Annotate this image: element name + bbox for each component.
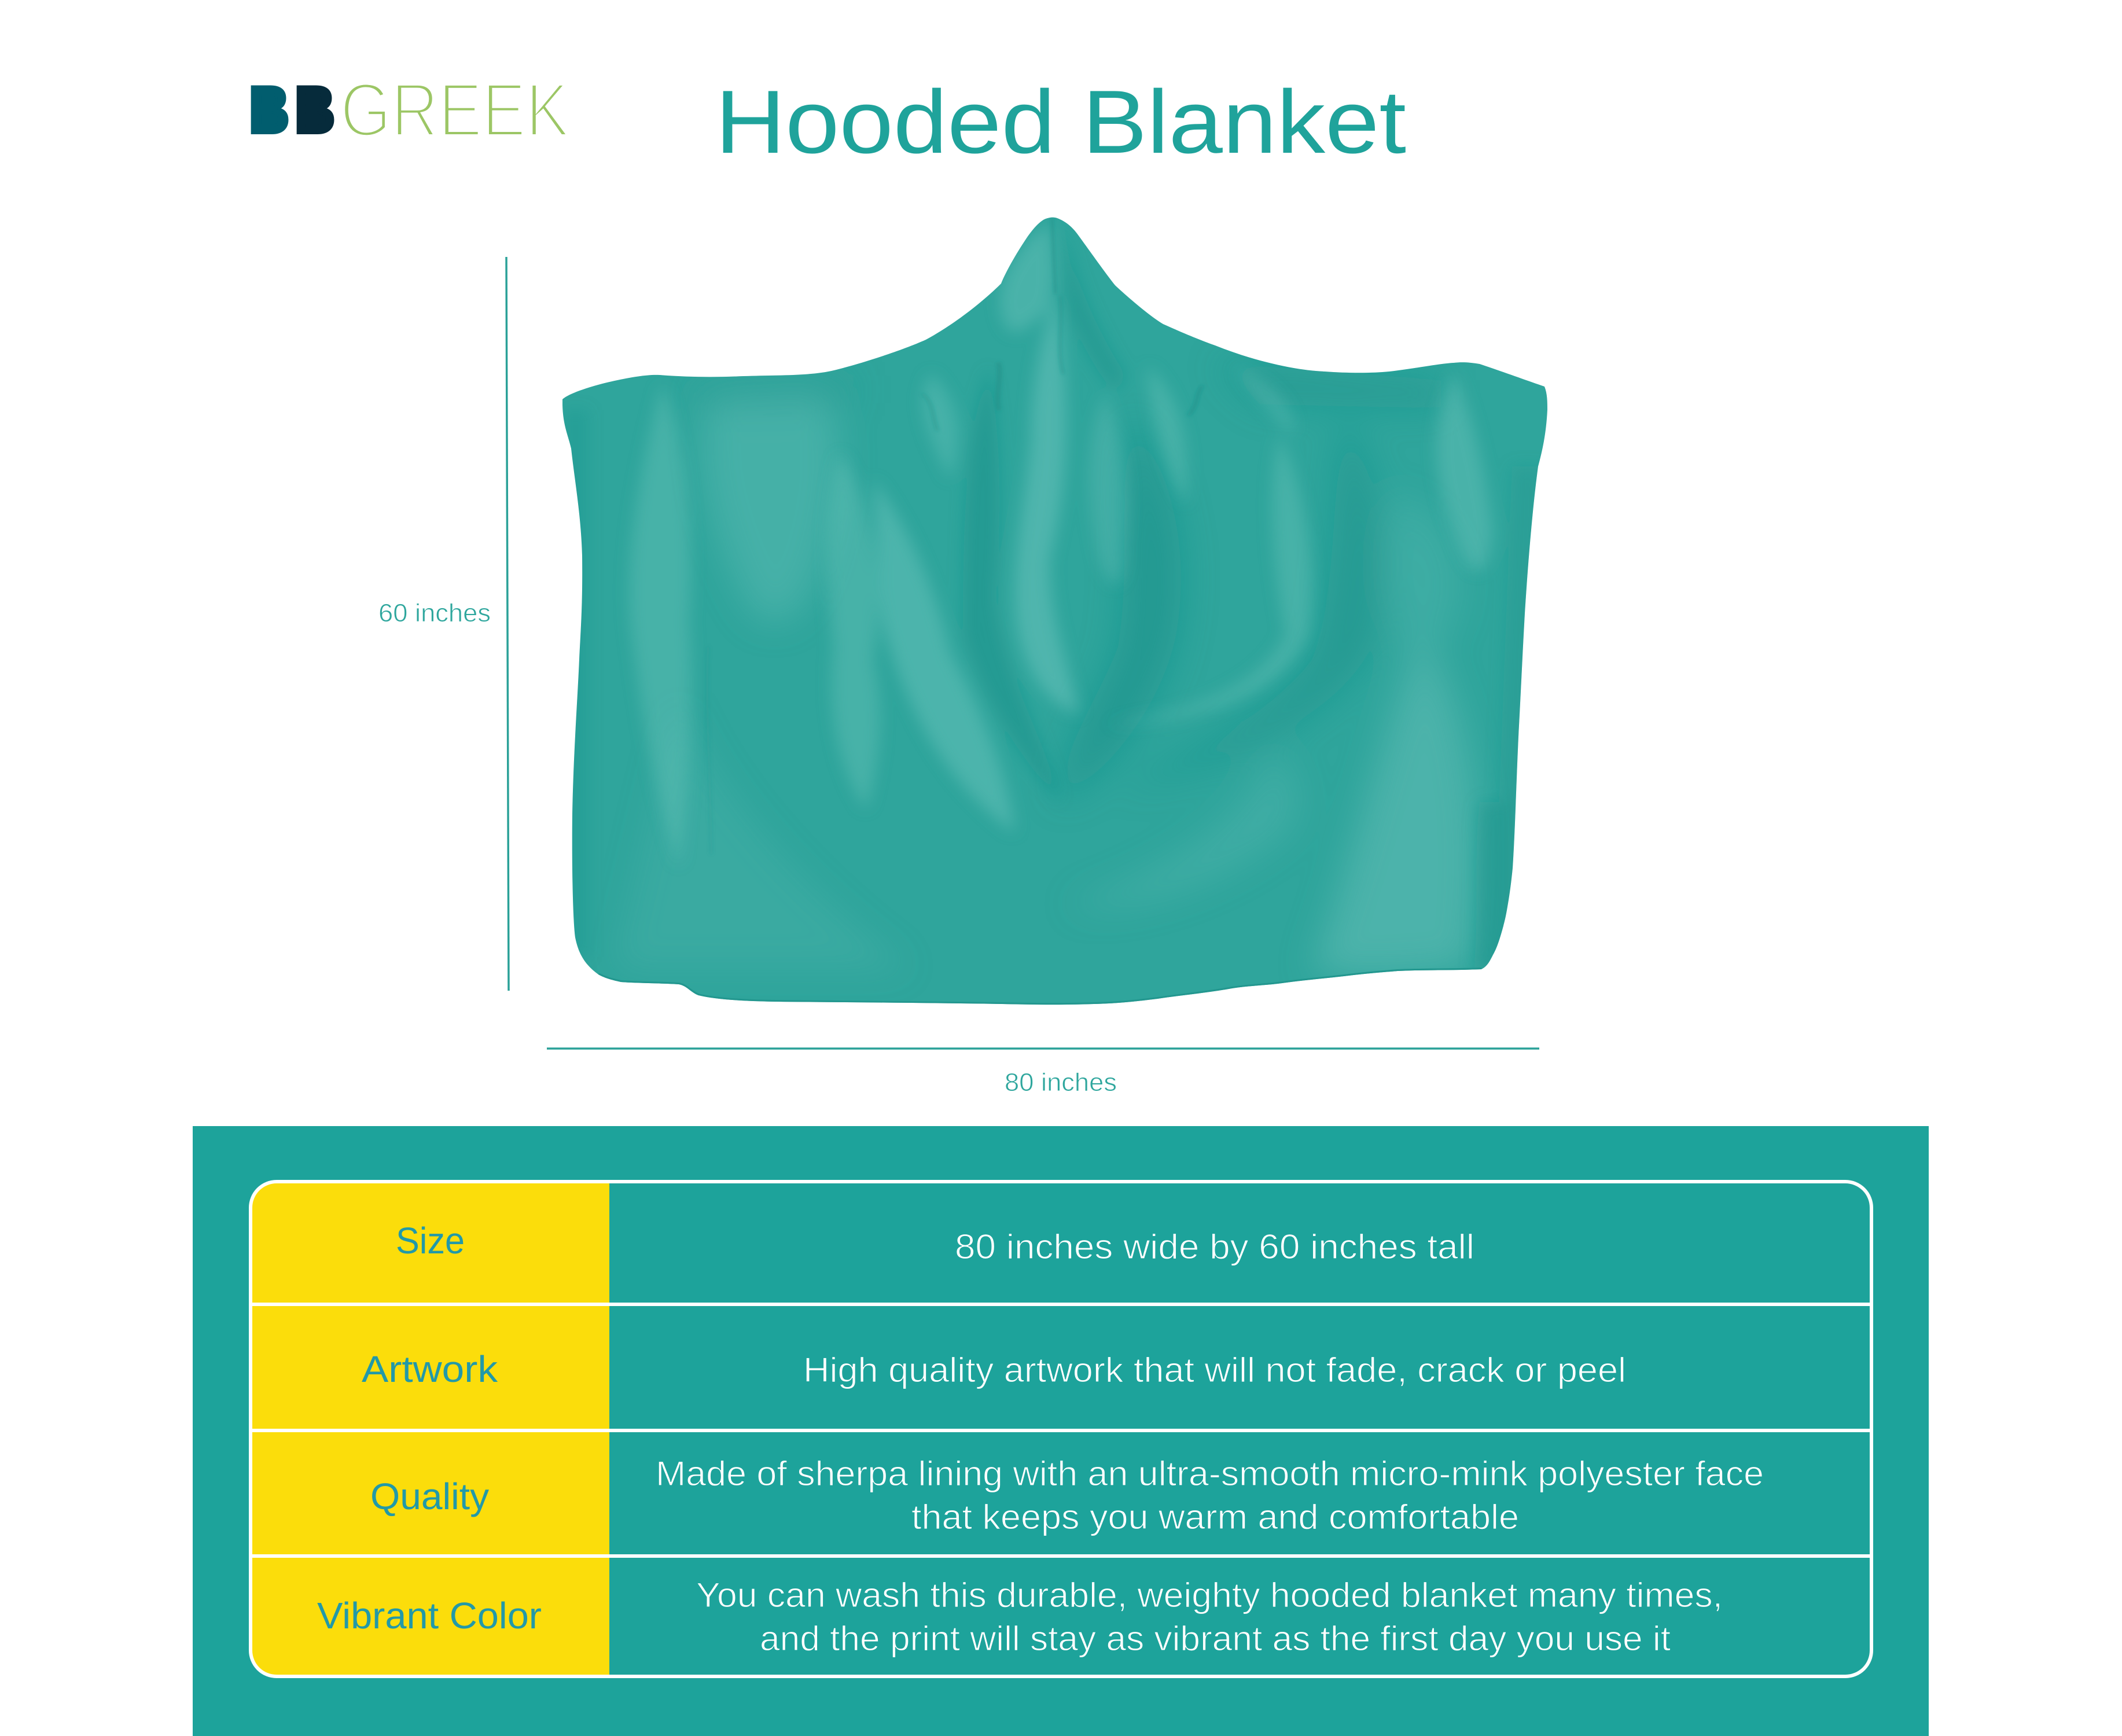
- fabric folds: [562, 219, 1544, 970]
- creases and seam: [922, 221, 1204, 431]
- panel: product specifications: [193, 1126, 1929, 1736]
- dimension line: height: [506, 257, 509, 991]
- logo mark: second B: B: [294, 72, 336, 148]
- row dividers: [251, 1304, 1871, 1556]
- logo wordmark: GREEK: [340, 67, 569, 152]
- blanket hem: [598, 969, 1481, 1005]
- row: size: [396, 1220, 1474, 1266]
- logo mark: first B: B: [248, 72, 290, 148]
- row: vibrant color: Vibrant Color: [317, 1595, 542, 1636]
- row: vibrant color: You can wash this durable, weighty hooded blanket many times,: [696, 1576, 1723, 1614]
- blanket illustration: [550, 208, 1562, 1018]
- logo: BB Greek: [248, 67, 569, 152]
- dimension line: width: [547, 1047, 1539, 1050]
- dimension label: 80 inches: 80 inches: [1005, 1068, 1117, 1097]
- row: quality: Made of sherpa lining with an ultra-smooth micro-mink polyester face: [656, 1454, 1764, 1493]
- row: artwork: [362, 1348, 1626, 1390]
- row: quality: Quality: [370, 1476, 489, 1517]
- table frame: [251, 1182, 1871, 1676]
- row: quality: [370, 1454, 1764, 1536]
- dimension label: 60 inches: 60 inches: [378, 599, 491, 627]
- row: vibrant color: and the print will stay as vibrant as the first day you use it: [760, 1619, 1671, 1658]
- row: size: 80 inches wide by 60 inches tall: [955, 1227, 1474, 1266]
- row: size: Size: [396, 1220, 465, 1261]
- row: quality: that keeps you warm and comfortable: [911, 1498, 1519, 1536]
- row: artwork: High quality artwork that will not fade, crack or peel: [803, 1351, 1626, 1389]
- row: vibrant color: [317, 1576, 1723, 1658]
- table label column: [251, 1182, 609, 1676]
- broad soft shading: [615, 363, 1478, 974]
- row: artwork: Artwork: [362, 1348, 498, 1390]
- blanket base shape: [550, 208, 1562, 1018]
- title: Hooded Blanket: [715, 72, 1406, 172]
